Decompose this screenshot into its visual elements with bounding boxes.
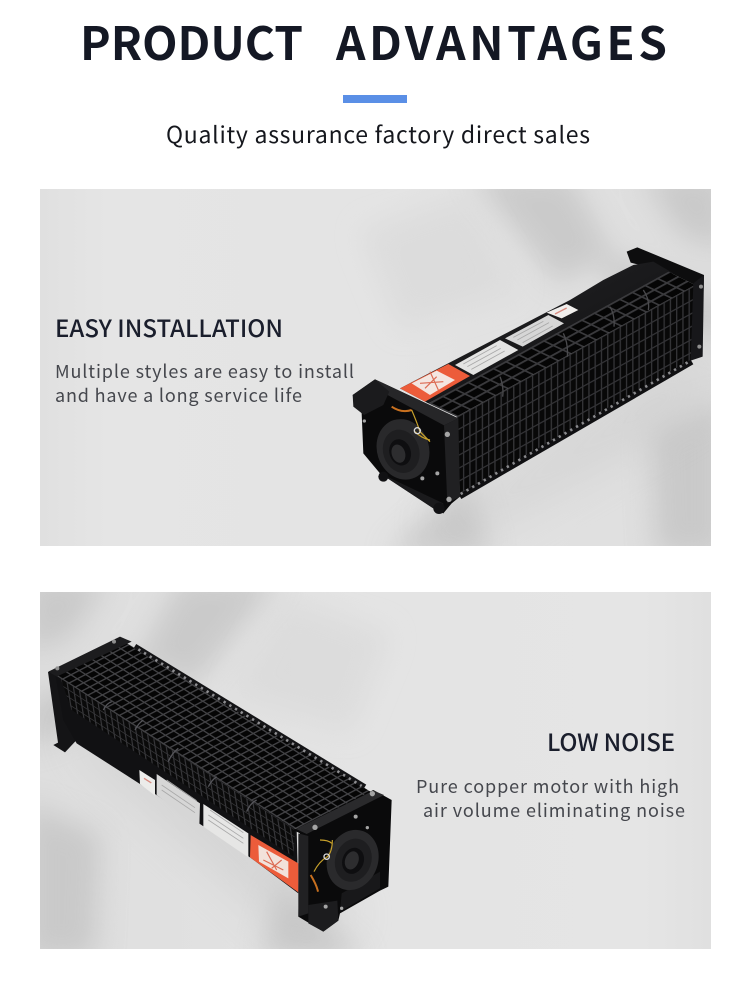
motor disc [369, 412, 437, 487]
white spec labels [455, 340, 518, 375]
wire guard top [428, 272, 695, 417]
white spec labels [139, 770, 155, 796]
description: easy installation: Multiple styles are easy to install [55, 358, 354, 384]
subtitle: Quality assurance factory direct sales [166, 116, 590, 150]
motor disc [318, 823, 387, 897]
rear flange [627, 247, 704, 357]
cylinder body [55, 673, 298, 893]
panel background [40, 175, 725, 555]
title [80, 8, 667, 74]
guard rivet row [460, 362, 692, 497]
frame screws [312, 791, 375, 910]
wire guard side [60, 677, 295, 857]
product photo: cross-flow fan, motor end front-right [48, 637, 392, 932]
guard rivet row [135, 646, 365, 787]
rear flange [48, 669, 76, 752]
frame screws [363, 419, 452, 502]
title: ADVANTAGES [335, 8, 667, 74]
wire guard top [55, 640, 373, 829]
panel background [26, 578, 711, 958]
motor end frame [353, 379, 460, 513]
guard ridges [500, 290, 649, 397]
panel: easy installation [40, 175, 725, 555]
frame feet [378, 472, 445, 514]
soft fan shadow [128, 776, 298, 902]
wires [314, 840, 332, 872]
wire guard side [457, 285, 695, 495]
title: PRODUCT [80, 8, 303, 74]
red warning label [250, 835, 298, 892]
motor end frame [293, 790, 392, 932]
cylinder body [400, 262, 673, 403]
wires [392, 407, 412, 411]
guard ridges [103, 702, 257, 812]
description: low noise: Pure copper motor with high [416, 773, 679, 799]
rear end plate [691, 275, 704, 361]
heading: low noise: LOW NOISE [547, 723, 675, 758]
heading: easy installation: EASY INSTALLATION [55, 309, 283, 344]
rear end plate [48, 637, 132, 677]
description: low noise [416, 773, 685, 823]
description: easy installation: and have a long service life [55, 382, 302, 408]
panel: low noise [26, 578, 711, 958]
description: easy installation [55, 358, 354, 408]
blue accent bar [343, 95, 407, 103]
red warning label [400, 364, 470, 402]
soft fan shadow [494, 383, 679, 506]
product photo: cross-flow fan, motor end front-left [353, 247, 704, 514]
description: low noise: air volume eliminating noise [423, 797, 685, 823]
